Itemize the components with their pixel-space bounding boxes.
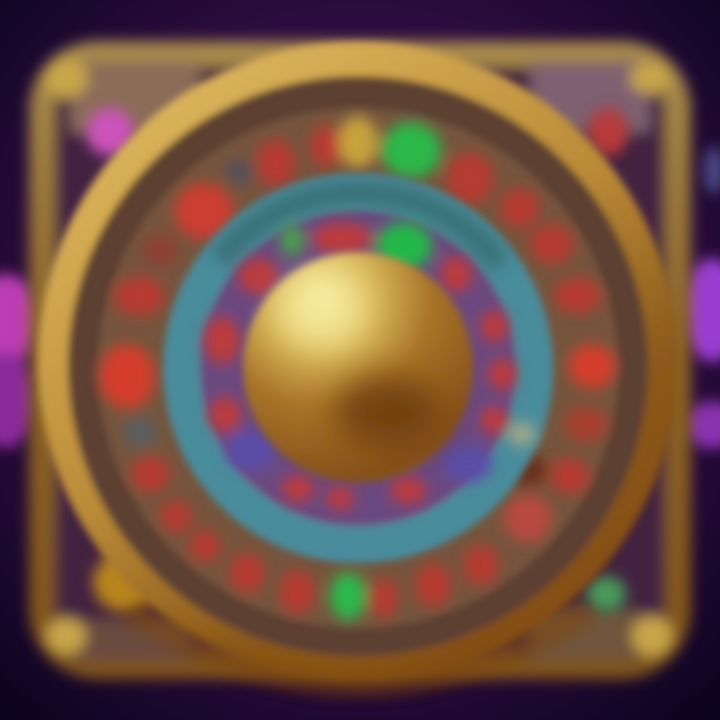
square frame <box>42 54 678 666</box>
purple glow left <box>0 274 40 448</box>
lower rim shadow <box>130 610 590 685</box>
outer pockets <box>99 116 616 620</box>
teal inner ring <box>163 173 553 563</box>
inner pockets <box>204 222 536 510</box>
frame corner fills <box>70 62 650 660</box>
purple glow right <box>682 146 720 449</box>
wheel <box>38 42 678 685</box>
teal ring upper shade <box>220 192 500 265</box>
central gold dome <box>243 252 473 482</box>
corner colour accents <box>86 108 628 612</box>
outer gold rim <box>38 42 678 682</box>
corner highlights <box>44 58 672 656</box>
